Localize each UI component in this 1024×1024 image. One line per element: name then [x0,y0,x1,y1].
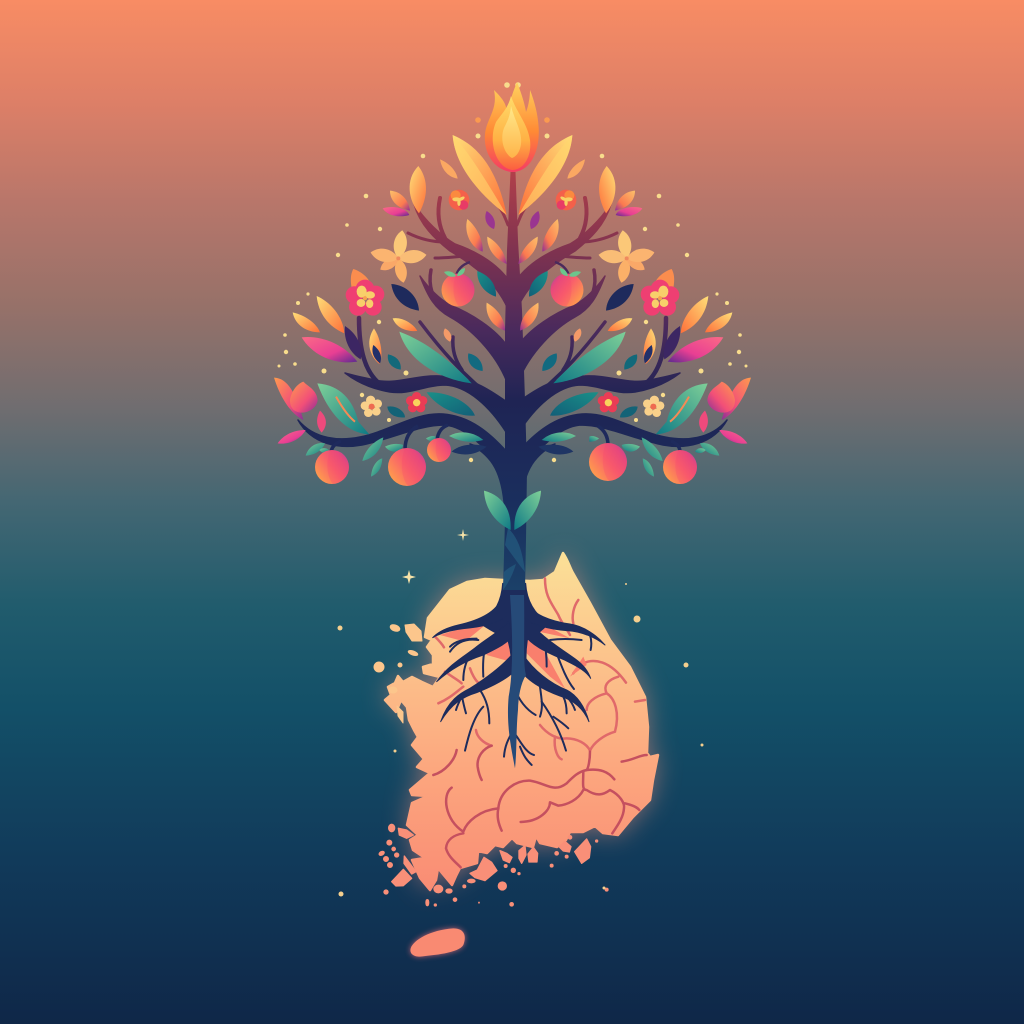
scattered dots near map [338,583,704,896]
map of South Korea [374,553,658,906]
trunk leaf [484,491,511,530]
upper tree half, left [274,82,516,530]
sparkles [402,529,469,584]
trunk braid highlight [503,528,525,590]
region lines south [433,746,647,867]
cream flower [361,396,382,417]
Jeju island glow [410,928,465,957]
big green leaf [399,332,472,383]
northwest islands [374,623,422,723]
left fruit [315,425,451,486]
southern islands [379,824,608,906]
branches [298,198,516,514]
red flower [406,392,427,412]
lower leaves and blossoms [274,296,511,530]
trunk [503,172,527,590]
sparkle dots [278,82,510,462]
upper apple [442,262,474,306]
flame blossom [485,82,539,172]
pink flare behind roots [440,618,587,688]
tulip [274,378,303,420]
map glow [385,553,658,890]
right fruit [589,426,697,484]
roots [433,583,605,768]
green leaf with accent [317,383,369,434]
large flame leaf [453,135,507,215]
upper leaves and blossoms [346,135,507,316]
region lines north [435,578,645,759]
cream star flower [369,229,427,284]
upper tree half, right (mirror) [509,82,751,530]
small red flower [449,190,469,210]
Jeju island [410,928,465,957]
pink flower [346,269,384,316]
